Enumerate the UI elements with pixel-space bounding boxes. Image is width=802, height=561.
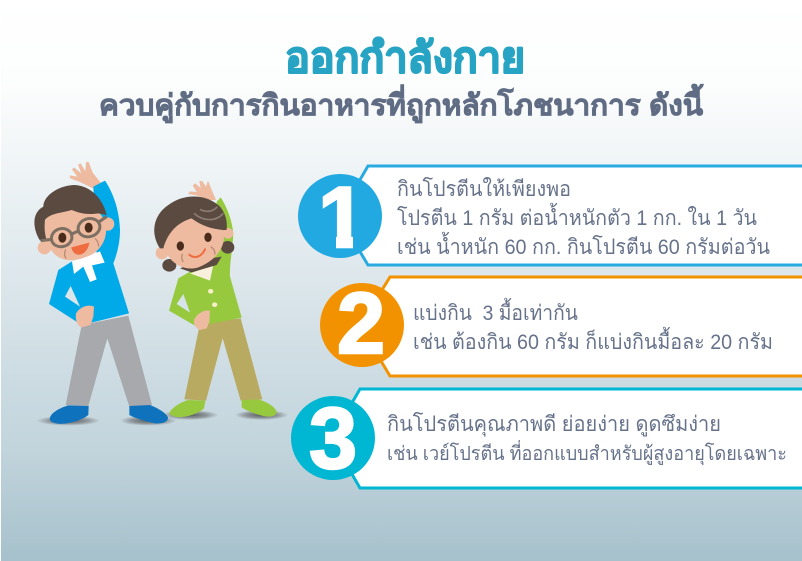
text: step 1 [397, 177, 770, 259]
text: step 2 [413, 298, 773, 354]
icon: woman [154, 181, 288, 420]
text: step 2: เช่น ต้องกิน 60 กรัม ก็แบ่งกินมื้อละ 20 กรัม [413, 327, 773, 354]
panel: step 3 [291, 389, 802, 488]
text: step 1: กินโปรตีนให้เพียงพอ [397, 177, 571, 201]
title: ออกกำลังกาย [285, 34, 525, 81]
text: step 1: โปรตีน 1 กรัม ต่อน้ำหนักตัว 1 กก. ใน 1 วัน [397, 203, 757, 230]
text: step 2: แบ่งกิน 3 มื้อเท่ากัน [413, 298, 578, 325]
title: ออกกำลังกาย [285, 34, 525, 81]
badge 1 [298, 174, 382, 258]
badge 3: 3 [309, 391, 357, 487]
panel frame 1 [350, 166, 802, 265]
icon: man [34, 162, 177, 426]
badge 2 [320, 276, 404, 372]
badge 3 [291, 391, 375, 487]
text: step 3 [387, 412, 787, 466]
illustration: exercising couple [34, 162, 288, 426]
text: step 3: กินโปรตีนคุณภาพดี ย่อยง่าย ดูดซึมง่าย [387, 412, 721, 437]
subtitle: ควบคู่กับการกินอาหารที่ถูกหลักโภชนาการ ดังนี้ [99, 83, 704, 123]
panel frame 2 [372, 277, 802, 376]
text: step 1: เช่น น้ำหนัก 60 กก. กินโปรตีน 60 กรัมต่อวัน [397, 232, 770, 259]
badge 1: 1 [318, 170, 366, 266]
panel: step 2 [320, 276, 802, 376]
panel: step 1 [298, 166, 802, 266]
badge 2: 2 [337, 276, 385, 372]
panel frame 3 [342, 389, 802, 488]
